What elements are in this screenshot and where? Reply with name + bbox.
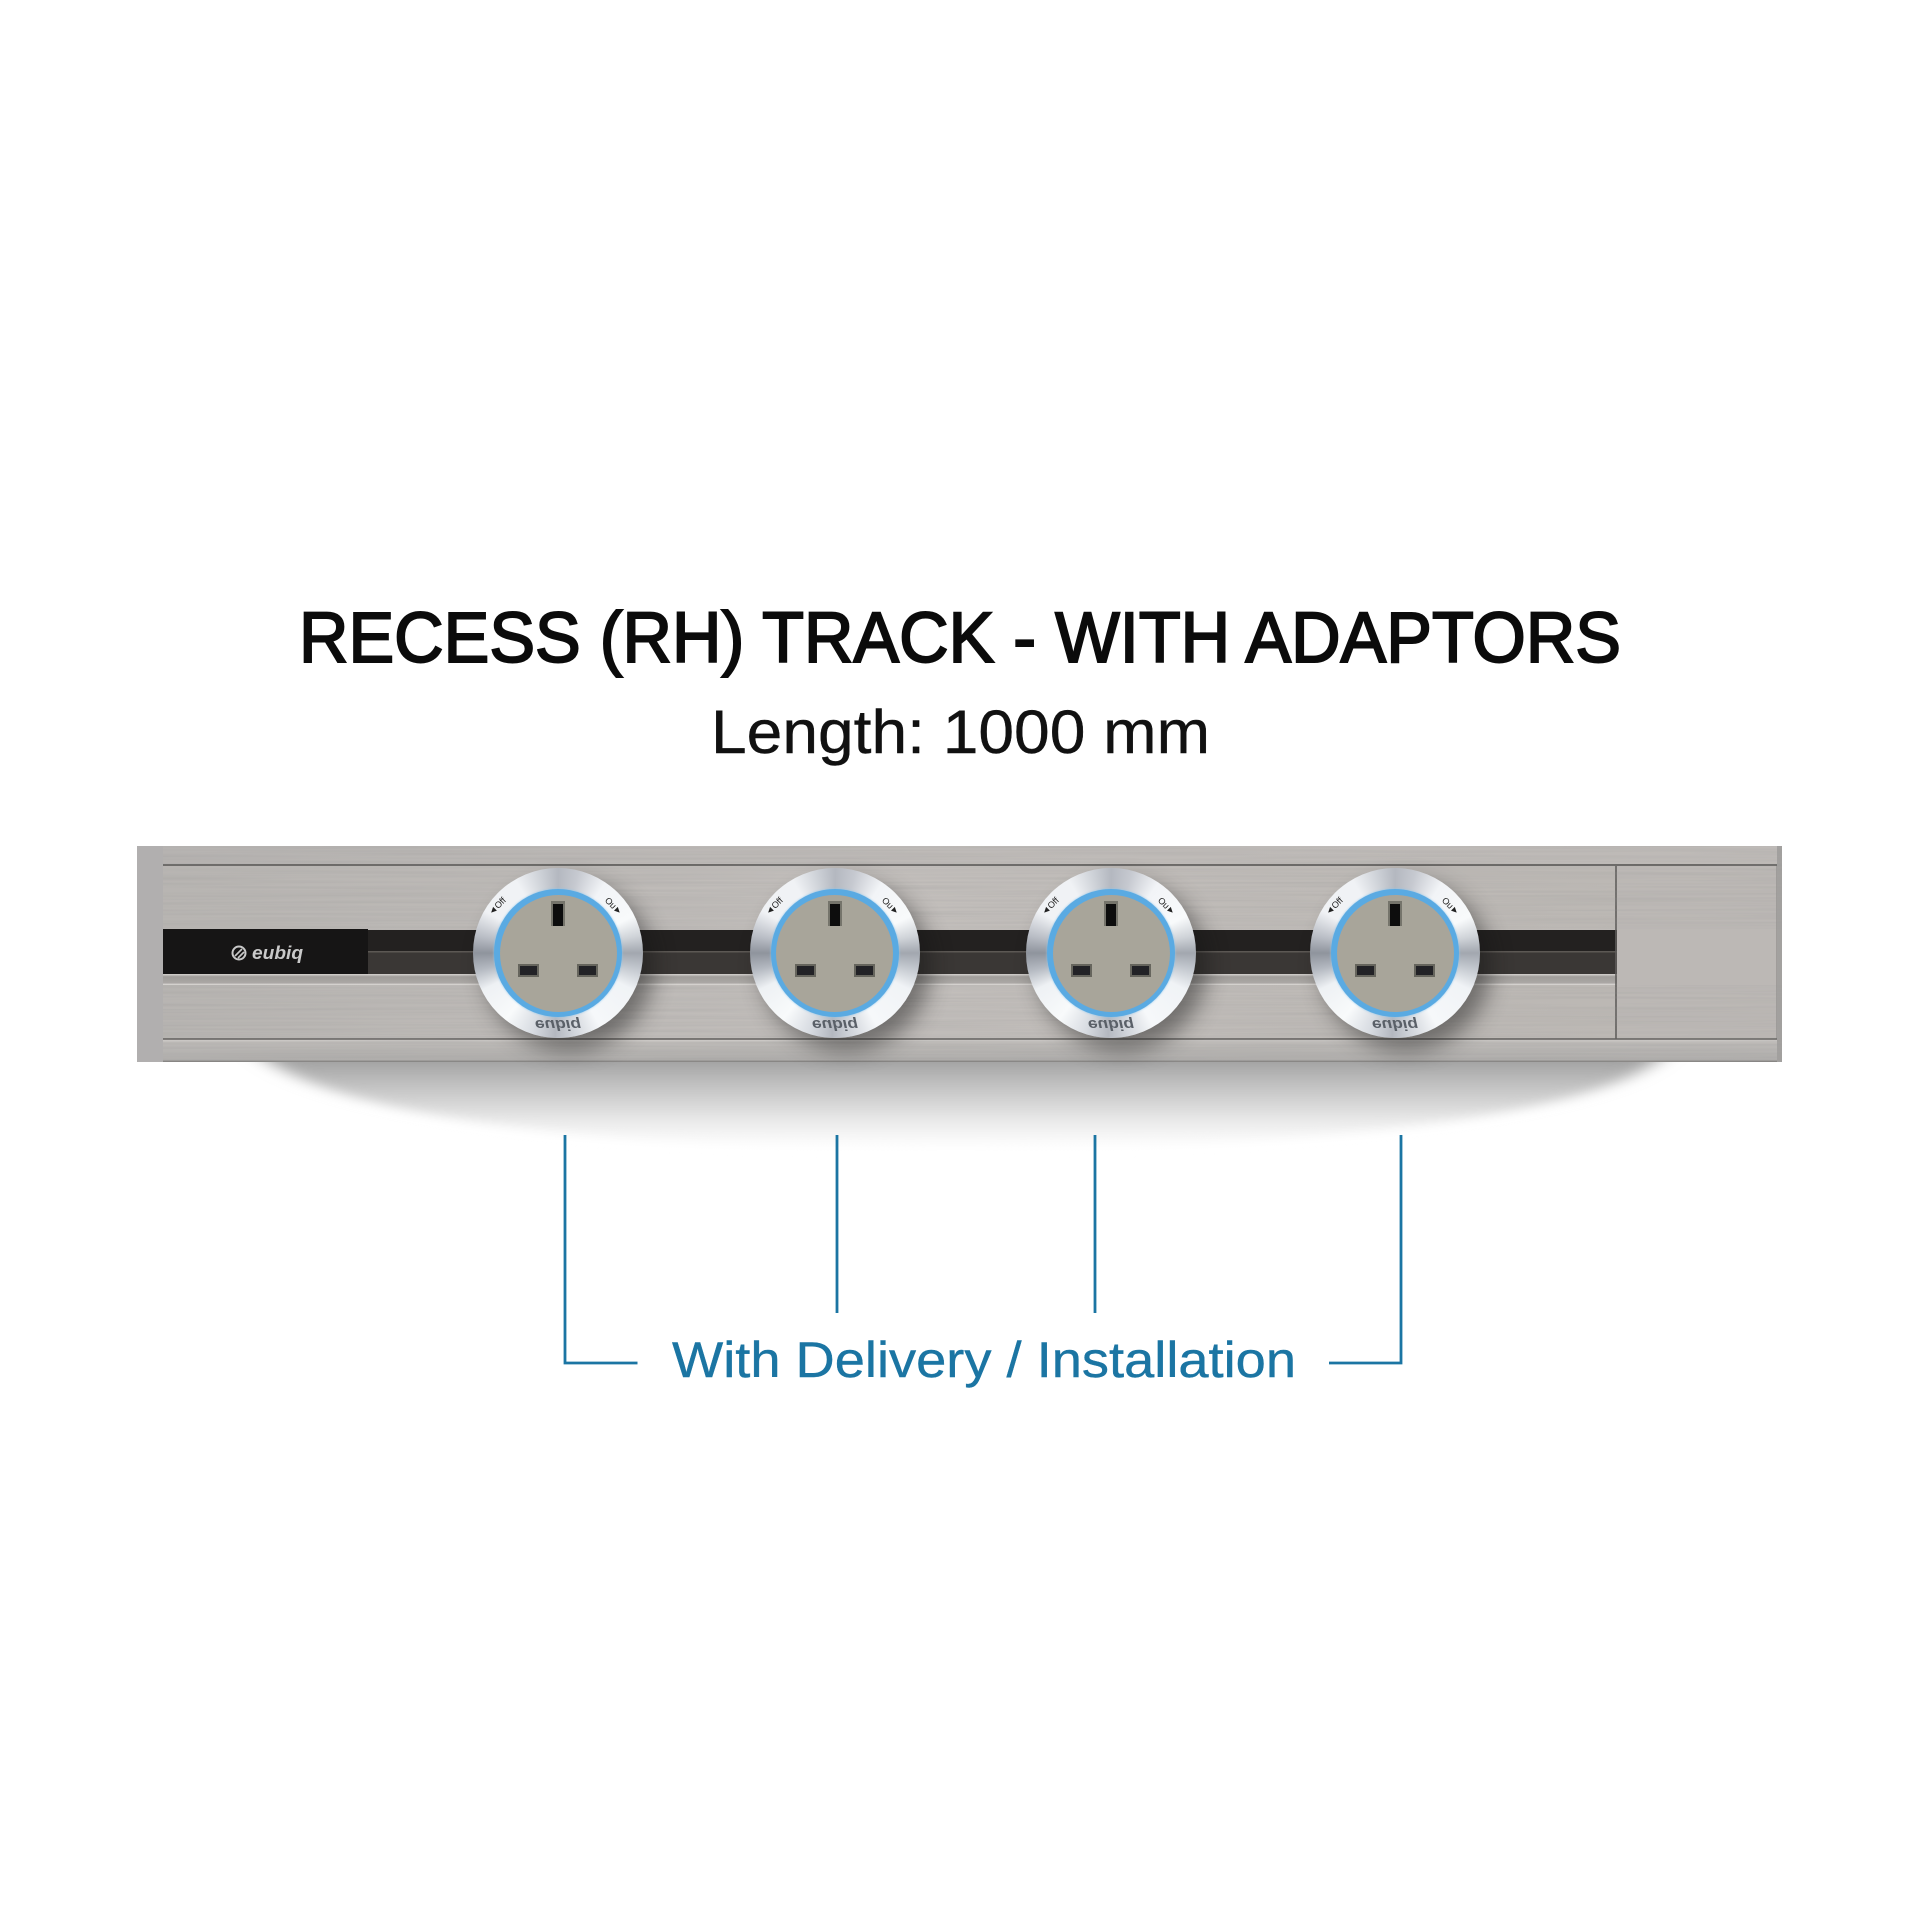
- socket adaptor 1: [473, 868, 643, 1038]
- socket adaptor 3: [1026, 868, 1196, 1038]
- upper panel: [163, 866, 1616, 929]
- logo mark: [232, 946, 246, 960]
- neutral slot: [1071, 964, 1092, 977]
- brand: eubiq: [1372, 1016, 1418, 1033]
- neutral slot: [794, 964, 816, 977]
- logo wordmark: eubiq: [252, 943, 303, 963]
- outer frame: [137, 846, 1782, 1062]
- on label: ◄uO: [603, 895, 625, 917]
- live slot: [854, 964, 874, 977]
- earth pin slot: [1104, 901, 1118, 926]
- track drop shadow: [255, 1050, 1667, 1148]
- blank end panel: [1617, 866, 1777, 1039]
- off label: ◄Off: [1039, 895, 1061, 917]
- brand: eubiq: [1088, 1016, 1134, 1033]
- rail: [163, 974, 1617, 985]
- earth pin slot: [828, 901, 842, 926]
- earth pin slot: [1388, 901, 1402, 926]
- subtitle: length: Length: 1000 mm: [711, 698, 1210, 766]
- socket channel: [368, 930, 1617, 974]
- live slot: [1414, 964, 1435, 977]
- blue ring and faceplate: [494, 889, 622, 1017]
- left end cap: [137, 846, 163, 1062]
- neutral slot: [518, 964, 539, 977]
- live slot: [577, 964, 598, 977]
- off label: ◄Off: [486, 895, 508, 917]
- steel texture lower: [163, 985, 1782, 1062]
- blue ring and faceplate: [1047, 889, 1175, 1017]
- lower panel: [163, 985, 1616, 1039]
- off label: ◄Off: [1323, 895, 1345, 917]
- socket adaptor 2: [750, 868, 920, 1038]
- brushed steel texture: [163, 846, 1782, 929]
- caption: with delivery / installation: With Delivery / Installation: [672, 1332, 1296, 1388]
- live slot: [1130, 964, 1151, 977]
- bottom frame strip: [163, 1039, 1782, 1062]
- on label: ◄uO: [1156, 895, 1178, 917]
- on label: ◄uO: [1440, 895, 1462, 917]
- off label: ◄Off: [763, 895, 784, 917]
- brand: eubiq: [812, 1016, 858, 1033]
- bracket lines to caption: [565, 1135, 1401, 1363]
- socket adaptor 4: [1310, 868, 1480, 1038]
- black brand label: [163, 929, 368, 974]
- blue ring and faceplate: [1331, 889, 1459, 1017]
- brand: eubiq: [535, 1016, 581, 1033]
- blue ring and faceplate: [770, 889, 898, 1017]
- earth pin slot: [551, 901, 565, 926]
- recessed track body: [137, 846, 1782, 1062]
- title: RECESS (RH) TRACK - WITH ADAPTORS: [299, 599, 1621, 678]
- on label: ◄uO: [879, 895, 901, 917]
- neutral slot: [1355, 964, 1376, 977]
